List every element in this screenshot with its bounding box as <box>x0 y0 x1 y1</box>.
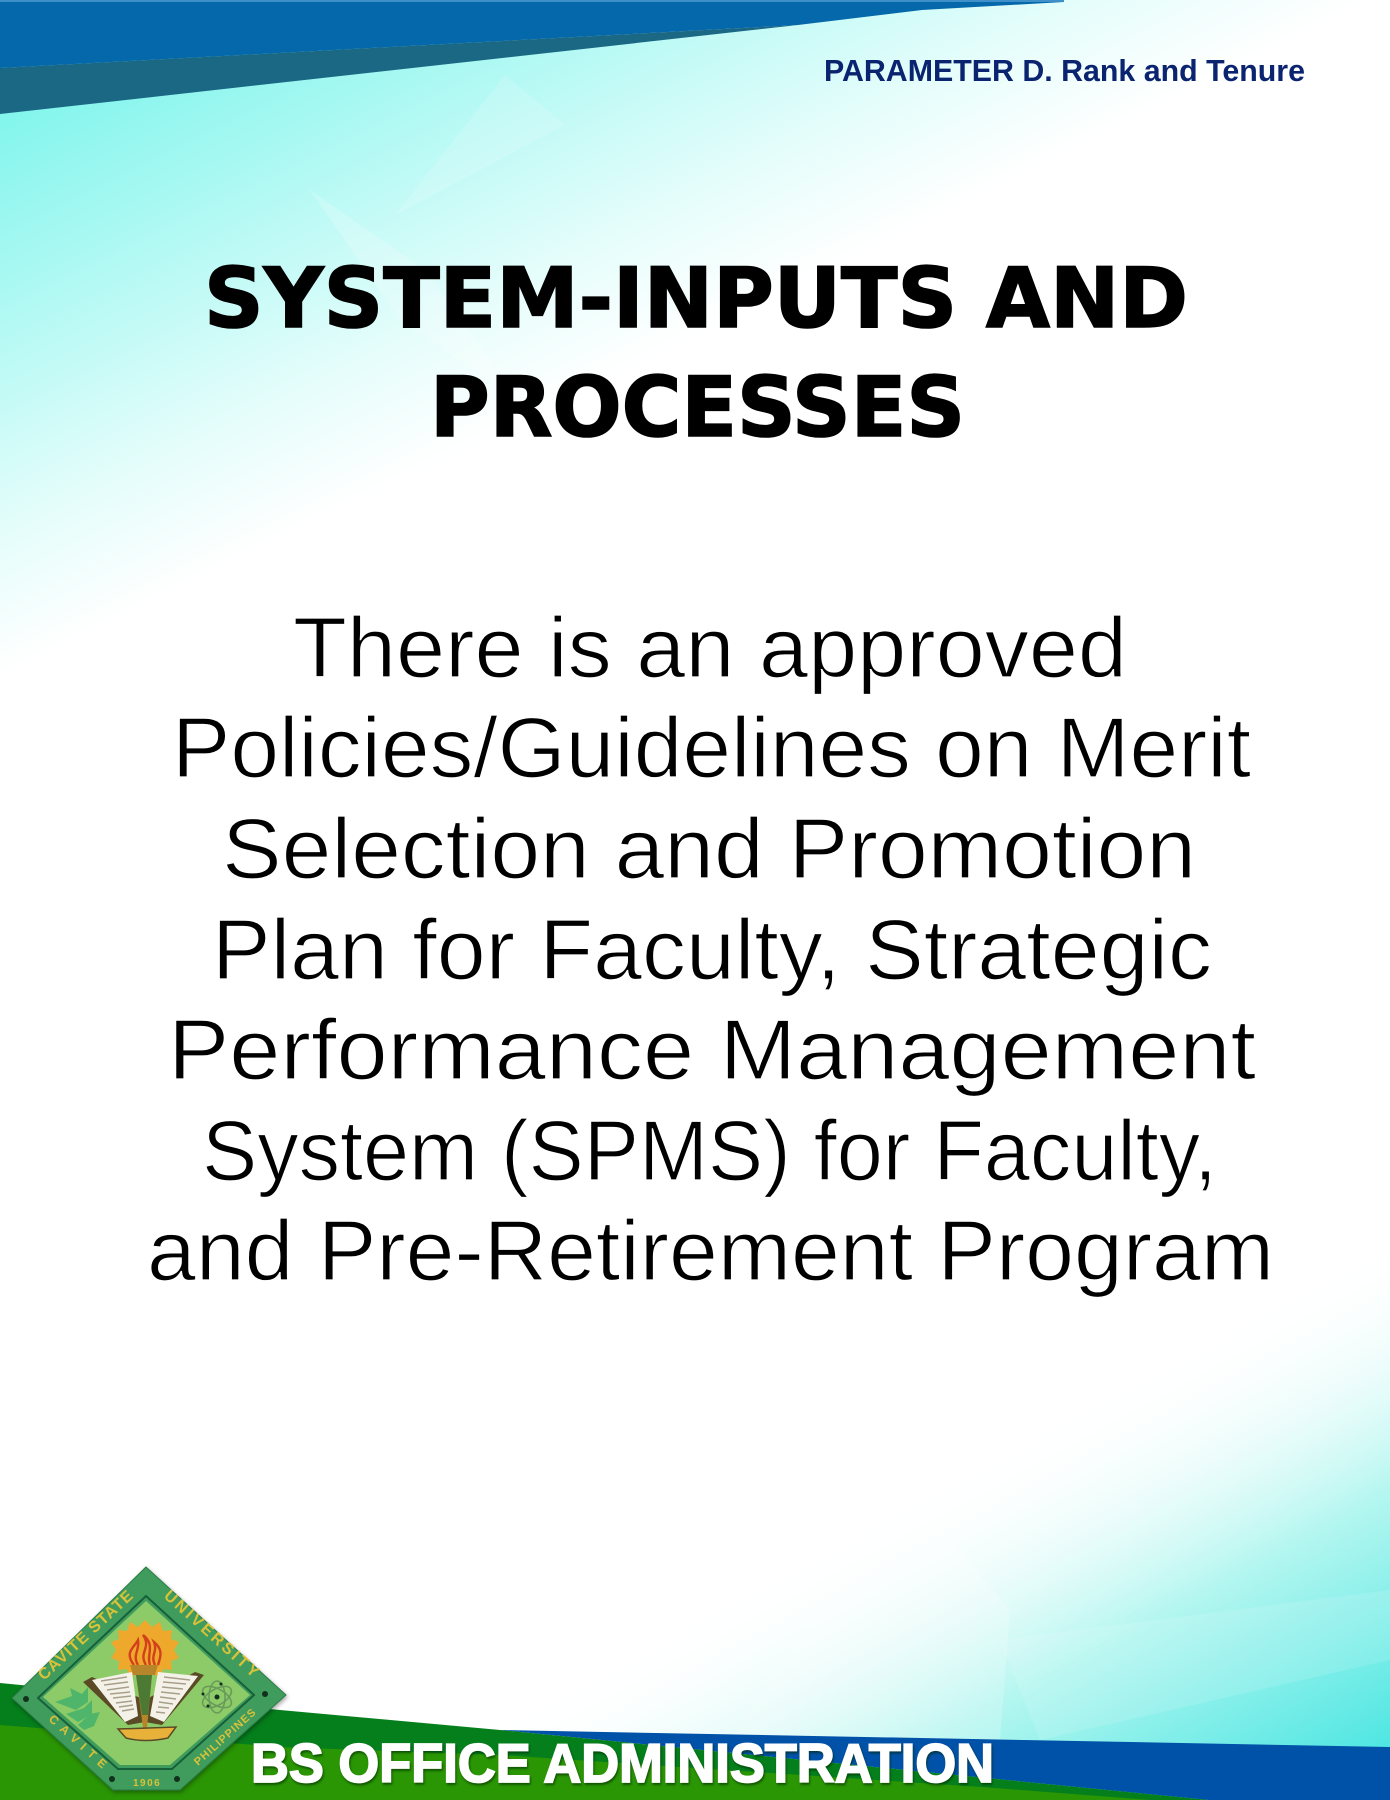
seal lettering: 1906 <box>133 1778 161 1789</box>
body text: System (SPMS) for Faculty, <box>202 1104 1217 1199</box>
title <box>204 250 1188 456</box>
seal lettering: CAVITE STATE <box>35 1587 137 1684</box>
seal lettering: CAVITE <box>46 1712 114 1775</box>
icon: atom <box>199 1681 235 1713</box>
body text <box>147 601 1274 1299</box>
bottom banner <box>0 1683 1390 1800</box>
body text: Policies/Guidelines on Merit <box>172 701 1251 796</box>
body text: Selection and Promotion <box>222 802 1196 897</box>
icon: plant <box>55 1687 100 1730</box>
logo: Cavite State University seal <box>12 1567 286 1790</box>
icon: sun <box>111 1620 179 1680</box>
body text: Plan for Faculty, Strategic <box>212 903 1212 998</box>
header label: PARAMETER D. Rank and Tenure <box>824 53 1305 88</box>
seal dots <box>23 1691 268 1782</box>
seal lettering: UNIVERSITY <box>160 1587 264 1683</box>
top banner <box>0 0 1064 114</box>
title: PROCESSES <box>430 359 965 456</box>
icon: open book <box>83 1672 204 1725</box>
icon: flame <box>130 1635 160 1665</box>
body text: and Pre-Retirement Program <box>147 1204 1274 1299</box>
seal lettering <box>35 1587 264 1789</box>
icon: torch <box>130 1665 158 1728</box>
title: SYSTEM-INPUTS AND <box>204 250 1188 347</box>
body text: There is an approved <box>293 601 1127 696</box>
icon: gear base <box>118 1727 176 1740</box>
footer title: BS OFFICE ADMINISTRATION <box>251 1732 994 1794</box>
body text: Performance Management <box>168 1003 1256 1098</box>
seal lettering: PHILIPPINES <box>192 1706 259 1768</box>
